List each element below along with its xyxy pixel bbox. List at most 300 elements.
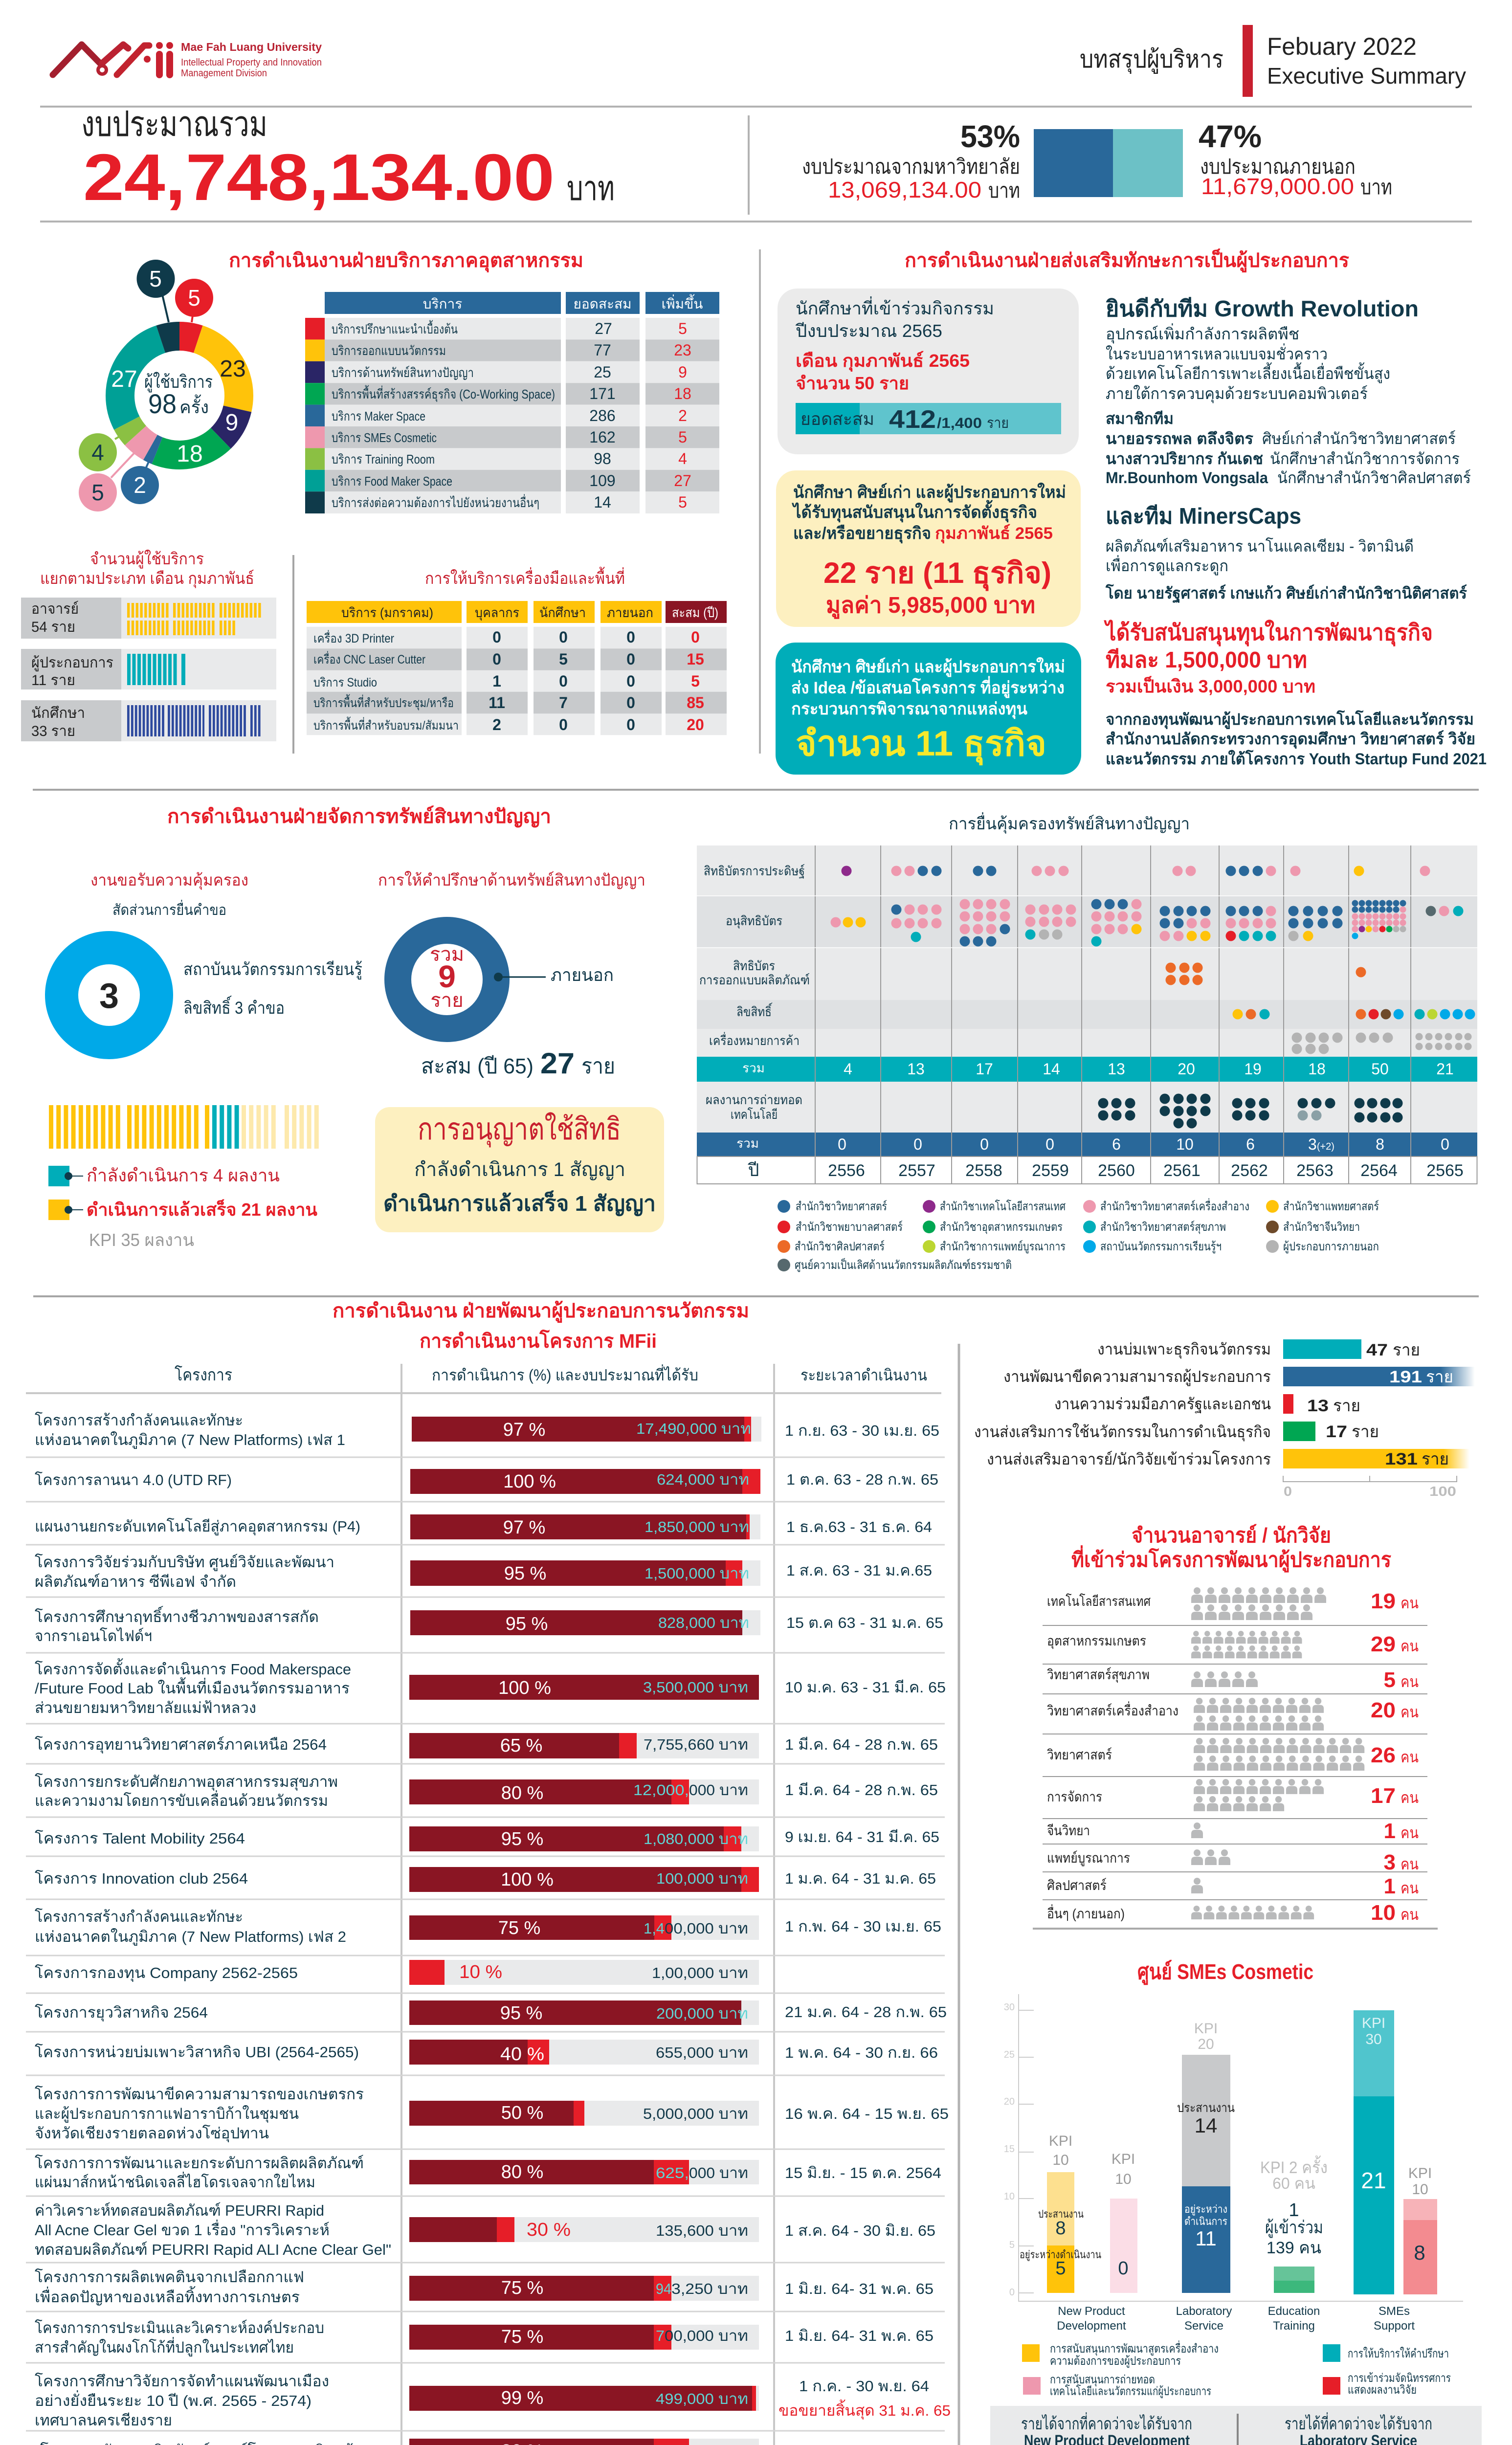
project row 12: 1,00,000 บาท <box>652 1964 748 1981</box>
panel: expected income <box>990 2406 1482 2445</box>
pictogram: researchers by school: 26 <box>1371 1743 1396 1767</box>
chart: IP filing matrix: การออกแบบผลิตภัณฑ์ <box>699 973 810 987</box>
project row 3: แผนงานยกระดับเทคโนโลยีสู่ภาคอุตสาหกรรม (P4) <box>35 1518 360 1536</box>
chart: IP filing matrix: 10 <box>1176 1135 1194 1153</box>
text block: winners: และนวัตกรรม ภายใต้โครงการ Youth Startup Fund 2021 <box>1106 750 1487 768</box>
bar chart: programs: 13 <box>1307 1397 1329 1415</box>
heading: industry services: การดำเนินงานฝ่ายบริการภาคอุตสาหกรรม <box>229 250 583 273</box>
project row 13: โครงการยุววิสาหกิจ 2564 <box>35 2004 208 2022</box>
pictogram: researchers by school: วิทยาศาสตร์ <box>1047 1747 1112 1762</box>
panel: students joined: จำนวน 50 ราย <box>796 373 909 393</box>
table: services: 27 <box>674 472 691 489</box>
header title <box>1080 25 1466 97</box>
table: equipment: เครื่อง CNC Laser Cutter <box>313 651 425 667</box>
project row 17: All Acne Clear Gel ขวด 1 เรื่อง "การวิเคราะห์ <box>35 2220 330 2239</box>
table: services: 2 <box>678 407 687 424</box>
project row 11: แห่งอนาคตในภูมิภาค (7 New Platforms) เฟส 2 <box>35 1928 346 1946</box>
table: services: 5 <box>678 493 687 511</box>
chart: IP filing matrix: รวม <box>742 1061 765 1075</box>
legend: SMEs Cosmetic: การเข้าร่วมจัดนิทรรศการ <box>1348 2372 1451 2385</box>
chart: SMEs Cosmetic bars: ประสานงาน <box>1038 2208 1084 2220</box>
panel: protection requests: ลิขสิทธิ์ 3 คำขอ <box>183 996 285 1018</box>
project row 11: 00,000 บาท <box>665 1920 748 1937</box>
text block: winners: รวมเป็นเงิน 3,000,000 บาท <box>1106 675 1315 696</box>
panel: students joined: 412 <box>889 405 936 434</box>
project row 12: โครงการกองทุน Company 2562-2565 <box>35 1964 298 1982</box>
legend: schools: สำนักวิชาการแพทย์บูรณาการ <box>940 1240 1066 1254</box>
project row 18: เพื่อลดปัญหาของเหลือทิ้งทางการเกษตร <box>35 2286 300 2306</box>
legend: schools: สำนักวิชาแพทยศาสตร์ <box>1283 1200 1379 1213</box>
donut: users 98: 4 <box>91 440 104 465</box>
text block: winners: ด้วยเทคโนโลยีการเพาะเลี้ยงเนื้อเยื่อพืชขั้นสูง <box>1106 362 1390 383</box>
chart: SMEs Cosmetic bars: KPI <box>1194 2021 1218 2037</box>
legend: schools: สถาบันนวัตกรรมการเรียนรู้ฯ <box>1100 1240 1222 1254</box>
table: equipment: 0 <box>626 694 635 711</box>
bar chart: programs: งานความร่วมมือภาครัฐและเอกชน <box>1054 1395 1271 1414</box>
project row 21 <box>35 2439 928 2445</box>
heading: intellectual property: การดำเนินงานฝ่ายจัดการทรัพย์สินทางปัญญา <box>167 805 551 828</box>
panel: expected income: รายได้ที่คาดว่าจะได้รับจาก <box>1285 2412 1432 2433</box>
chart: SMEs Cosmetic bars: 10 <box>1412 2181 1428 2198</box>
project row 6: 10 ม.ค. 63 - 31 มี.ค. 65 <box>785 1679 946 1696</box>
bar chart: programs: 100 <box>1429 1484 1456 1499</box>
chart: SMEs Cosmetic bars: 0 <box>1009 2287 1015 2298</box>
project row 16: 625, <box>656 2164 689 2181</box>
bar chart: programs: 131 <box>1385 1450 1418 1468</box>
chart: IP filing matrix: 20 <box>1178 1060 1195 1078</box>
panel: protection requests: สถาบันนวัตกรรมการเรียนรู้ <box>183 960 362 979</box>
project row 6: /Future Food Lab ในพื้นที่เมืองนวัตกรรมอาหาร <box>35 1677 350 1697</box>
text block: winners: ทีมละ 1,500,000 บาท <box>1106 647 1307 672</box>
chart: IP filing matrix: 13 <box>907 1060 925 1078</box>
chart: IP filing matrix: 2562 <box>1231 1161 1268 1180</box>
table: services: บริการ SMEs Cosmetic <box>332 430 437 445</box>
chart: works KPI stripes: KPI 35 ผลงาน <box>89 1230 194 1250</box>
chart: IP filing matrix: 6 <box>1112 1135 1121 1153</box>
legend: SMEs Cosmetic: เทคโนโลยีและนวัตกรรมแก่ผู้ประกอบการ <box>1050 2384 1211 2399</box>
chart: IP filing matrix: 0 <box>838 1135 846 1153</box>
total budget <box>81 105 615 214</box>
heading: SMEs Cosmetic: ศูนย์ SMEs Cosmetic <box>1137 1959 1313 1985</box>
text block: winners: นักศึกษาสำนักวิชาการจัดการ <box>1270 450 1460 467</box>
chart: SMEs Cosmetic bars: 15 <box>1004 2144 1015 2155</box>
pictogram: researchers by school: อุตสาหกรรมเกษตร <box>1047 1633 1146 1649</box>
project row 1: 17,490,000 บาท <box>636 1420 751 1437</box>
chart: SMEs Cosmetic bars: 5 <box>1009 2240 1015 2250</box>
chart: IP filing matrix: สิทธิบัตรการประดิษฐ์ <box>704 864 805 879</box>
project row 15: 50 % <box>501 2103 543 2123</box>
panel: users by type <box>21 550 276 741</box>
bar chart: programs: ราย <box>1333 1397 1360 1415</box>
bar chart: programs: 17 <box>1326 1423 1347 1441</box>
donut: users 98: 5 <box>91 480 104 505</box>
chart: IP filing matrix: 6 <box>1246 1135 1255 1153</box>
panel: ideas in progress: จำนวน 11 ธุรกิจ <box>796 724 1046 766</box>
chart: SMEs Cosmetic bars: KPI 2 ครั้ง <box>1260 2156 1328 2177</box>
project row 19 <box>35 2319 934 2356</box>
budget split: บาท <box>1360 176 1392 199</box>
chart: SMEs Cosmetic bars: Training <box>1273 2319 1315 2333</box>
project row 8 <box>35 1773 938 1809</box>
project row 16: 80 % <box>501 2162 543 2182</box>
chart: IP filing matrix: 8 <box>1376 1135 1384 1153</box>
panel: students joined: /1,400 <box>937 415 982 431</box>
project row 1: โครงการสร้างกำลังคนและทักษะ <box>35 1412 243 1429</box>
pictogram: researchers by school: แพทย์บูรณาการ <box>1047 1850 1130 1867</box>
header title: Febuary 2022 <box>1267 33 1417 60</box>
chart: IP filing matrix: 2557 <box>898 1161 935 1180</box>
table: equipment: 0 <box>626 716 635 734</box>
project row 7: โครงการอุทยานวิทยาศาสตร์ภาคเหนือ 2564 <box>35 1736 327 1754</box>
pictogram: researchers by school: 10 <box>1371 1901 1396 1925</box>
heading: innovation entrepreneur dev: การดำเนินงานโครงการ MFii <box>420 1330 657 1352</box>
chart: IP filing matrix: 2561 <box>1163 1161 1201 1180</box>
project row 18: 3,250 บาท <box>671 2280 748 2297</box>
bar chart: programs: 191 <box>1389 1368 1422 1386</box>
project row 5 <box>35 1605 943 1645</box>
table: services: 18 <box>674 385 691 402</box>
table: equipment: 0 <box>492 628 501 646</box>
total budget: 24,748,134.00 <box>83 140 555 214</box>
donut: users 98: 5 <box>149 266 162 291</box>
legend: schools: ผู้ประกอบการภายนอก <box>1283 1240 1379 1254</box>
pictogram: researchers by school: 3 <box>1384 1850 1396 1874</box>
project row 11: 1,4 <box>644 1920 665 1937</box>
pictogram: researchers by school: 19 <box>1371 1589 1396 1613</box>
panel: IP consulting: 27 <box>540 1047 575 1080</box>
project row 14: โครงการหน่วยบ่มเพาะวิสาหกิจ UBI (2564-2565) <box>35 2044 359 2061</box>
project row 13: 95 % <box>500 2003 542 2023</box>
panel: ideas in progress <box>776 643 1081 775</box>
panel: expected income: รายได้จากที่คาดว่าจะได้รับจาก <box>1021 2412 1192 2433</box>
panel: IP consulting: 9 <box>438 959 456 994</box>
project row 6: ส่วนขยายมหาวิทยาลัยแม่ฟ้าหลวง <box>35 1699 256 1716</box>
pictogram: researchers by school: คน <box>1401 1637 1419 1655</box>
pictogram: researchers by school: วิทยาศาสตร์เครื่องสำอาง <box>1047 1701 1178 1718</box>
table: equipment: 0 <box>691 628 700 646</box>
project row 20: 499,000 บาท <box>656 2390 748 2407</box>
chart: IP filing matrix: 13 <box>1108 1060 1125 1078</box>
legend: schools <box>778 1198 1379 1272</box>
pictogram: researchers by school: 17 <box>1371 1784 1396 1808</box>
budget split: 53% <box>960 119 1020 154</box>
legend: schools: สำนักวิชาเทคโนโลยีสารสนเทศ <box>940 1200 1066 1213</box>
text block: winners: ในระบบอาหารเหลวแบบจมชั่วคราว <box>1106 343 1328 363</box>
panel: students joined: เดือน กุมภาพันธ์ 2565 <box>796 351 970 372</box>
table: equipment: เครื่อง 3D Printer <box>313 630 394 645</box>
pictogram: researchers by school: คน <box>1401 1879 1419 1897</box>
chart: SMEs Cosmetic bars: Development <box>1057 2319 1126 2333</box>
heading: innovation entrepreneur dev <box>333 1300 749 1352</box>
pictogram: researchers by school: 1 <box>1384 1819 1396 1843</box>
donut: users 98: 27 <box>111 366 137 392</box>
project row 1: 1 ก.ย. 63 - 30 เม.ย. 65 <box>785 1422 939 1439</box>
table: equipment: บริการพื้นที่สำหรับประชุม/หารือ <box>313 694 454 711</box>
chart: SMEs Cosmetic bars: 10 <box>1115 2171 1132 2187</box>
project row 13: 200,000 บาท <box>656 2005 748 2022</box>
table: equipment: 11 <box>489 694 505 711</box>
chart: IP filing matrix: สิทธิบัตร <box>733 958 775 973</box>
panel: users by type: นักศึกษา <box>31 705 85 721</box>
project row 16: แผ่นมาส์กหน้าชนิดเจลลี่ไฮโดรเจลจากใยไหม <box>35 2172 315 2191</box>
project row 3: 97 % <box>503 1517 545 1538</box>
table: services: 23 <box>674 341 691 359</box>
project row 11 <box>35 1908 941 1946</box>
pictogram: researchers by school: ศิลปศาสตร์ <box>1047 1878 1107 1893</box>
chart: IP filing matrix: 3(+2) <box>1308 1135 1334 1153</box>
panel: students joined <box>778 289 1079 454</box>
chart: IP filing matrix: ปี <box>748 1160 759 1180</box>
donut: users 98: 18 <box>177 441 203 467</box>
project row 3: 1 ธ.ค.63 - 31 ธ.ค. 64 <box>786 1518 932 1535</box>
table: equipment: 20 <box>687 716 704 734</box>
project row 20: ขอขยายสิ้นสุด 31 ม.ค. 65 <box>778 2400 951 2420</box>
chart: SMEs Cosmetic bars: 25 <box>1004 2049 1015 2060</box>
table: equipment: 85 <box>687 694 704 711</box>
project row 2 <box>35 1469 938 1494</box>
bar chart: programs: 47 <box>1366 1341 1388 1359</box>
chart: SMEs Cosmetic bars: 30 <box>1365 2031 1382 2047</box>
project row 10 <box>35 1867 936 1892</box>
panel: protection requests: 3 <box>99 977 119 1016</box>
project row 13 <box>35 2000 947 2025</box>
project row 10: 100,000 บาท <box>656 1870 748 1887</box>
panel: users by type: อาจารย์ <box>31 600 79 617</box>
text block: winners: ยินดีกับทีม Growth Revolution <box>1106 296 1419 321</box>
chart: IP filing matrix: ลิขสิทธิ์ <box>736 1002 773 1019</box>
project row 9: 9 เม.ย. 64 - 31 มี.ค. 65 <box>785 1828 939 1845</box>
text block: winners: นายอรรถพล ตลึงจิตร <box>1106 430 1253 447</box>
chart: SMEs Cosmetic bars: KPI <box>1112 2151 1135 2167</box>
table: equipment: บริการ (มกราคม) <box>341 605 433 620</box>
text block: winners: นางสาวปริยากร กันเดช <box>1106 450 1263 467</box>
table: equipment: 2 <box>492 716 501 734</box>
table: services: 162 <box>589 428 616 446</box>
project row 2: 1 ต.ค. 63 - 28 ก.พ. 65 <box>786 1471 938 1488</box>
legend: SMEs Cosmetic: การให้บริการให้คำปรึกษา <box>1348 2347 1449 2360</box>
chart: IP filing matrix: 14 <box>1043 1060 1060 1078</box>
chart: SMEs Cosmetic bars: 11 <box>1195 2227 1217 2250</box>
table: equipment: บุคลากร <box>475 605 519 621</box>
project row 4: ผลิตภัณฑ์อาหาร ซีพีเอฟ จำกัด <box>35 1573 236 1590</box>
pictogram: researchers by school: คน <box>1401 1748 1419 1766</box>
table: services: 4 <box>678 450 687 467</box>
project row 17: 30 % <box>527 2220 571 2240</box>
project row 4: 1,500,000 บาท <box>645 1565 749 1582</box>
pictogram: researchers by school: จีนวิทยา <box>1047 1823 1090 1838</box>
panel: students joined: ปีงบประมาณ 2565 <box>795 321 942 341</box>
panel: IP consulting <box>378 871 645 1080</box>
project row 4: โครงการวิจัยร่วมกับบริษัท ศูนย์วิจัยและพัฒนา <box>35 1554 334 1571</box>
heading: entrepreneur skills: การดำเนินงานฝ่ายส่งเสริมทักษะการเป็นผู้ประกอบการ <box>905 248 1350 272</box>
budget split: 11,679,000.00 <box>1201 174 1354 199</box>
project row 15: จังหวัดเชียงรายตลอดห่วงโซ่อุปทาน <box>35 2125 269 2143</box>
chart: SMEs Cosmetic bars: 8 <box>1055 2218 1066 2239</box>
logo: MFii: Management Division <box>181 68 267 79</box>
panel: users by type: 33 ราย <box>31 723 75 739</box>
project row 1: แห่งอนาคตในภูมิภาค (7 New Platforms) เฟส 1 <box>35 1431 345 1449</box>
chart: IP filing matrix: 17 <box>976 1060 993 1078</box>
project row 20: 1 ก.ค. - 30 พ.ย. 64 <box>799 2378 929 2395</box>
chart: IP filing matrix: 2558 <box>965 1161 1002 1180</box>
project row 20: โครงการศึกษาวิจัยการจัดทำแผนพัฒนาเมือง <box>35 2373 329 2390</box>
table: equipment: 0 <box>559 672 568 690</box>
project row 14 <box>35 2040 938 2065</box>
chart: SMEs Cosmetic bars: 20 <box>1198 2036 1214 2052</box>
legend: schools: สำนักวิชาจีนวิทยา <box>1283 1221 1360 1234</box>
bar chart: programs: ราย <box>1422 1450 1449 1468</box>
project row 10: โครงการ Innovation club 2564 <box>35 1870 248 1887</box>
pictogram: researchers by school: คน <box>1401 1824 1419 1842</box>
project row 6 <box>35 1658 946 1716</box>
chart: SMEs Cosmetic bars: SMEs <box>1379 2305 1410 2318</box>
pictogram: researchers by school: คน <box>1401 1703 1419 1721</box>
project row 7 <box>35 1733 938 1758</box>
chart: works KPI stripes: ดำเนินการแล้วเสร็จ 21 ผลงาน <box>87 1199 317 1220</box>
legend: schools: สำนักวิชาวิทยาศาสตร์เครื่องสำอาง <box>1100 1198 1249 1213</box>
panel: users by type: 11 ราย <box>31 672 75 689</box>
chart: SMEs Cosmetic bars: 20 <box>1004 2096 1015 2107</box>
logo: MFii <box>53 41 322 79</box>
project row 17: ทดสอบผลิตภัณฑ์ PEURRI Rapid ALI Acne Clear Gel" <box>35 2241 391 2258</box>
project row 2: 624,000 บาท <box>657 1471 749 1488</box>
project row 18: 75 % <box>501 2278 543 2298</box>
panel: IP consulting: ราย <box>581 1054 615 1078</box>
text block: winners: เพื่อการดูแลกระดูก <box>1106 555 1228 576</box>
text block: winners <box>1103 296 1487 768</box>
project row 4: 1 ส.ค. 63 - 31 ม.ค.65 <box>786 1562 932 1579</box>
text block: winners: สมาชิกทีม <box>1106 410 1174 427</box>
panel: ideas in progress: ส่ง Idea /ข้อเสนอโครงการ ที่อยู่ระหว่าง <box>791 676 1065 698</box>
chart: SMEs Cosmetic bars: Service <box>1184 2319 1223 2333</box>
project row 9: โครงการ Talent Mobility 2564 <box>35 1830 245 1847</box>
project row 18: 94 <box>656 2280 671 2297</box>
pictogram: researchers by school: คน <box>1401 1594 1419 1612</box>
project row 4 <box>35 1554 932 1590</box>
panel: funded businesses: และ/หรือขยายธุรกิจ <box>793 524 931 544</box>
chart: SMEs Cosmetic bars: 8 <box>1414 2241 1425 2264</box>
table: equipment: นักศึกษา <box>539 605 586 620</box>
chart: IP filing matrix: 0 <box>1045 1135 1054 1153</box>
project row 15: 16 พ.ค. 64 - 15 พ.ย. 65 <box>785 2105 949 2122</box>
chart: SMEs Cosmetic bars: ดำเนินการ <box>1184 2215 1227 2227</box>
table: equipment: 0 <box>559 716 568 734</box>
panel: licensing <box>375 1107 664 1232</box>
table: services: บริการ <box>423 296 462 311</box>
chart: SMEs Cosmetic bars: อยู่ระหว่างดำเนินงาน <box>1020 2248 1101 2261</box>
chart: SMEs Cosmetic bars: 1 <box>1289 2200 1299 2221</box>
project row 10: 100 % <box>501 1869 554 1890</box>
pictogram: researchers by school: การจัดการ <box>1047 1789 1102 1804</box>
panel: protection requests <box>62 871 362 1043</box>
panel: ideas in progress: นักศึกษา ศิษย์เก่า และผู้ประกอบการใหม่ <box>791 657 1065 677</box>
table: equipment: 1 <box>492 672 501 690</box>
table header: projects: โครงการ <box>175 1365 232 1384</box>
pictogram: researchers by school: คน <box>1401 1906 1419 1923</box>
donut: users 98 <box>79 260 246 511</box>
project row 19: 75 % <box>501 2327 543 2347</box>
pictogram: researchers by school: คน <box>1401 1789 1419 1806</box>
logo: MFii: Intellectual Property and Innovation <box>181 57 322 68</box>
project row 16: 15 มิ.ย. - 15 ต.ค. 2564 <box>785 2164 941 2181</box>
panel: users by type: แยกตามประเภท เดือน กุมภาพันธ์ <box>40 569 254 588</box>
table header: projects <box>26 1364 941 1393</box>
table: equipment: บริการพื้นที่สำหรับอบรม/สัมมนา <box>313 716 459 733</box>
text block: winners: จากกองทุนพัฒนาผู้ประกอบการเทคโนโลยีและนวัตกรรม <box>1106 710 1474 730</box>
table: services <box>305 292 719 513</box>
table: services: 171 <box>589 385 616 402</box>
panel: ideas in progress: กระบวนการพิจารณาจากแหล่งทุน <box>791 700 1027 719</box>
project row 8: และความงามโดยการขับเคลื่อนด้วยนวัตกรรม <box>35 1790 328 1809</box>
panel: IP consulting: สะสม (ปี 65) <box>421 1054 534 1078</box>
legend: schools: ศูนย์ความเป็นเลิศด้านนวัตกรรมผลิตภัณฑ์ธรรมชาติ <box>795 1258 1012 1272</box>
project row 6: 3,500,000 บาท <box>643 1679 748 1696</box>
project row 6: 100 % <box>498 1678 551 1698</box>
chart: SMEs Cosmetic bars: 10 <box>1004 2191 1015 2202</box>
table: services: 9 <box>678 363 687 381</box>
chart: SMEs Cosmetic bars: Support <box>1374 2319 1415 2333</box>
project row 8: 12,000, <box>633 1781 689 1799</box>
table: services: บริการส่งต่อความต้องการไปยังหน่วยงานอื่นๆ <box>332 494 539 510</box>
pictogram: researchers by school: เทคโนโลยีสารสนเทศ <box>1047 1593 1151 1609</box>
chart: IP filing matrix: ผลงานการถ่ายทอด <box>706 1092 802 1107</box>
header title: บทสรุปผู้บริหาร <box>1080 45 1223 74</box>
panel: IP consulting: ภายนอก <box>551 965 614 985</box>
project row 17 <box>35 2202 935 2258</box>
table: services: บริการปรึกษาแนะนำเบื้องต้น <box>332 320 458 336</box>
table: services: 5 <box>678 320 687 337</box>
panel: users by type: ผู้ประกอบการ <box>31 655 113 671</box>
chart: works KPI stripes <box>48 1127 320 1250</box>
legend: SMEs Cosmetic: แสดงผลงานวิจัย <box>1348 2383 1417 2397</box>
table: equipment: การให้บริการเครื่องมือและพื้นที่ <box>425 567 625 587</box>
chart: SMEs Cosmetic bars: 0 <box>1118 2258 1129 2279</box>
text block: winners: และทีม MinersCaps <box>1106 503 1301 529</box>
table: equipment: 7 <box>559 694 568 711</box>
chart: SMEs Cosmetic bars: ผู้เข้าร่วม <box>1265 2217 1323 2238</box>
text block: winners: ได้รับสนับสนุนทุนในการพัฒนาธุรกิจ <box>1103 619 1433 646</box>
project row 11: 75 % <box>498 1918 540 1938</box>
chart: IP filing matrix: 2563 <box>1296 1161 1334 1180</box>
donut: users 98: 23 <box>220 356 246 382</box>
pictogram: researchers by school: อื่นๆ (ภายนอก) <box>1047 1904 1125 1921</box>
panel: funded businesses: นักศึกษา ศิษย์เก่า และผู้ประกอบการใหม่ <box>793 482 1066 503</box>
table: equipment: 5 <box>559 650 568 668</box>
chart: IP filing matrix: การยื่นคุ้มครองทรัพย์สินทางปัญญา <box>949 812 1190 834</box>
text block: winners: ผลิตภัณฑ์เสริมอาหาร นาโนแคลเซียม - วิตามินดี <box>1106 537 1414 555</box>
table: equipment: บริการ Studio <box>313 676 377 689</box>
table: equipment: 5 <box>691 672 700 690</box>
donut: users 98: 98 <box>148 388 177 419</box>
table: services: เพิ่มขึ้น <box>662 294 703 311</box>
panel: funded businesses: 22 ราย (11 ธุรกิจ) <box>823 556 1051 591</box>
project row 6: โครงการจัดตั้งและดำเนินการ Food Makerspace <box>35 1658 351 1678</box>
heading: researchers: จำนวนอาจารย์ / นักวิจัย <box>1132 1524 1331 1547</box>
table: services: บริการ Food Maker Space <box>332 474 452 489</box>
project row 10: 1 ม.ค. 64 - 31 ม.ค. 65 <box>785 1870 936 1887</box>
table: services: บริการ Training Room <box>332 452 435 467</box>
table: equipment: สะสม (ปี) <box>672 605 718 620</box>
table header: projects: ระยะเวลาดำเนินงาน <box>800 1366 927 1384</box>
chart: IP filing matrix: 0 <box>980 1135 989 1153</box>
bar chart: programs: งานส่งเสริมอาจารย์/นักวิจัยเข้าร่วมโครงการ <box>987 1450 1271 1468</box>
table: equipment: 15 <box>687 650 704 668</box>
chart: IP filing matrix: อนุสิทธิบัตร <box>726 913 782 929</box>
chart: IP filing matrix <box>697 812 1477 1184</box>
project row 8: 80 % <box>501 1783 543 1803</box>
panel: licensing: ดำเนินการแล้วเสร็จ 1 สัญญา <box>383 1190 656 1216</box>
chart: SMEs Cosmetic bars <box>1004 1994 1463 2333</box>
